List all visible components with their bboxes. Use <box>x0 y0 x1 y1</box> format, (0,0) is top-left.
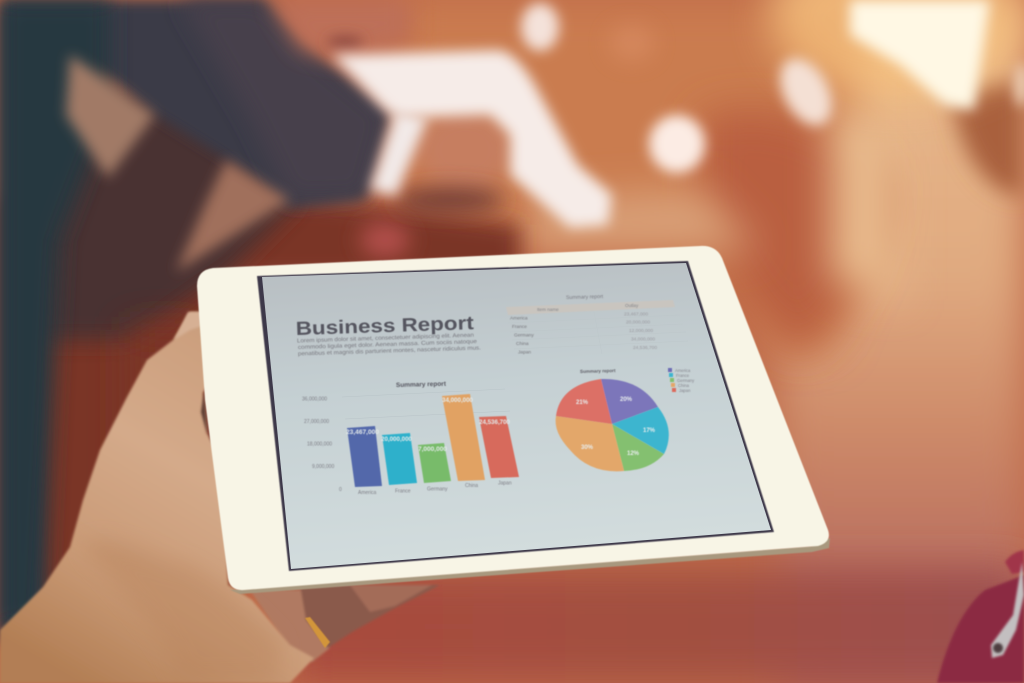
slice percentages: 20% <box>620 397 633 403</box>
table rows: China <box>516 341 529 347</box>
slice: China 30% <box>556 416 624 471</box>
report intro text <box>297 333 481 357</box>
thumb crease <box>201 392 207 434</box>
table rows: France <box>512 324 527 330</box>
category labels: France <box>395 488 411 494</box>
pie legend: France <box>676 373 690 378</box>
report heading: Business Report <box>295 313 475 340</box>
slice percentages: 30% <box>581 445 594 451</box>
y axis labels: 27,000,000 <box>304 419 329 425</box>
slice percentages <box>576 397 656 457</box>
screen <box>262 263 771 569</box>
bar value labels: 24,536,700 <box>479 420 511 426</box>
y axis labels: 36,000,000 <box>302 396 327 402</box>
pie legend: China <box>678 383 690 388</box>
hand: palm and wrist <box>0 312 314 683</box>
thumb nail <box>174 310 200 339</box>
bar chart <box>302 381 519 496</box>
background arm highlights <box>66 55 155 178</box>
pie title: Summary report <box>580 368 616 374</box>
slice percentages: 21% <box>576 400 589 406</box>
tablet body <box>197 246 829 590</box>
bar value labels: 7,000,000 <box>418 447 448 453</box>
category labels: China <box>465 483 478 489</box>
report intro text: commodo ligula eget dolor. Aenean massa. Cum sociis natoque <box>298 339 477 351</box>
slice: Japan 21% <box>556 379 612 424</box>
table header <box>506 300 675 315</box>
table rows: 12,000,000 <box>629 328 653 334</box>
bar value labels <box>346 398 511 453</box>
dark suit sleeve <box>0 0 410 640</box>
slice: America 20% <box>601 379 658 424</box>
bar value labels: 34,000,000 <box>442 398 474 404</box>
slice: Germany 12% <box>612 424 664 471</box>
slice percentages: 12% <box>627 451 640 457</box>
report intro text: penatibus et magnis dis parturient montes, nascetur ridiculus mus. <box>298 345 481 357</box>
hand: palm crease shading <box>97 545 277 676</box>
slice percentages: 17% <box>643 428 656 434</box>
y axis labels <box>302 396 342 493</box>
table title: Summary report <box>566 294 604 301</box>
table grid <box>508 312 688 354</box>
category labels: America <box>358 490 377 496</box>
grid lines <box>342 389 510 419</box>
summary table: Item name <box>537 307 559 312</box>
hand: fingers under the tablet <box>250 585 440 662</box>
table rows: 34,000,000 <box>631 336 655 342</box>
table rows <box>510 312 657 356</box>
y axis labels: 9,000,000 <box>312 464 334 470</box>
pie legend: America <box>675 368 691 373</box>
bar value labels: 20,000,000 <box>381 437 413 443</box>
category labels <box>358 480 512 496</box>
tablet edge <box>230 538 830 594</box>
y axis labels: 0 <box>339 487 342 493</box>
summary table: Outlay <box>625 303 639 308</box>
table rows: America <box>510 316 528 322</box>
y axis labels: 18,000,000 <box>307 442 332 448</box>
white document and cuff in the background <box>332 50 612 228</box>
category labels: Japan <box>498 480 512 486</box>
category labels: Germany <box>427 486 448 492</box>
gold ring <box>305 617 330 648</box>
pie legend: Japan <box>679 388 691 393</box>
pie legend: Germany <box>677 378 695 383</box>
summary table <box>506 294 688 356</box>
tablet <box>197 246 830 594</box>
table rows: 20,000,000 <box>626 320 650 326</box>
out-of-focus highlights <box>521 0 1024 173</box>
slice: France 17% <box>612 407 669 454</box>
table rows: 24,536,700 <box>633 345 657 351</box>
pie legend <box>668 368 695 393</box>
table rows: Japan <box>518 350 531 356</box>
pie chart <box>556 368 695 471</box>
bar value labels: 23,467,000 <box>346 430 380 436</box>
screen bezel line <box>257 261 774 571</box>
table rows: Germany <box>514 332 534 338</box>
bars <box>347 394 519 487</box>
chart title: Summary report <box>396 381 447 389</box>
report intro text: Lorem ipsum dolor sit amet, consectetuer adipiscing elit. Aenean <box>297 333 474 344</box>
red bag with clasp <box>937 550 1024 683</box>
table rows: 23,467,000 <box>624 312 648 318</box>
